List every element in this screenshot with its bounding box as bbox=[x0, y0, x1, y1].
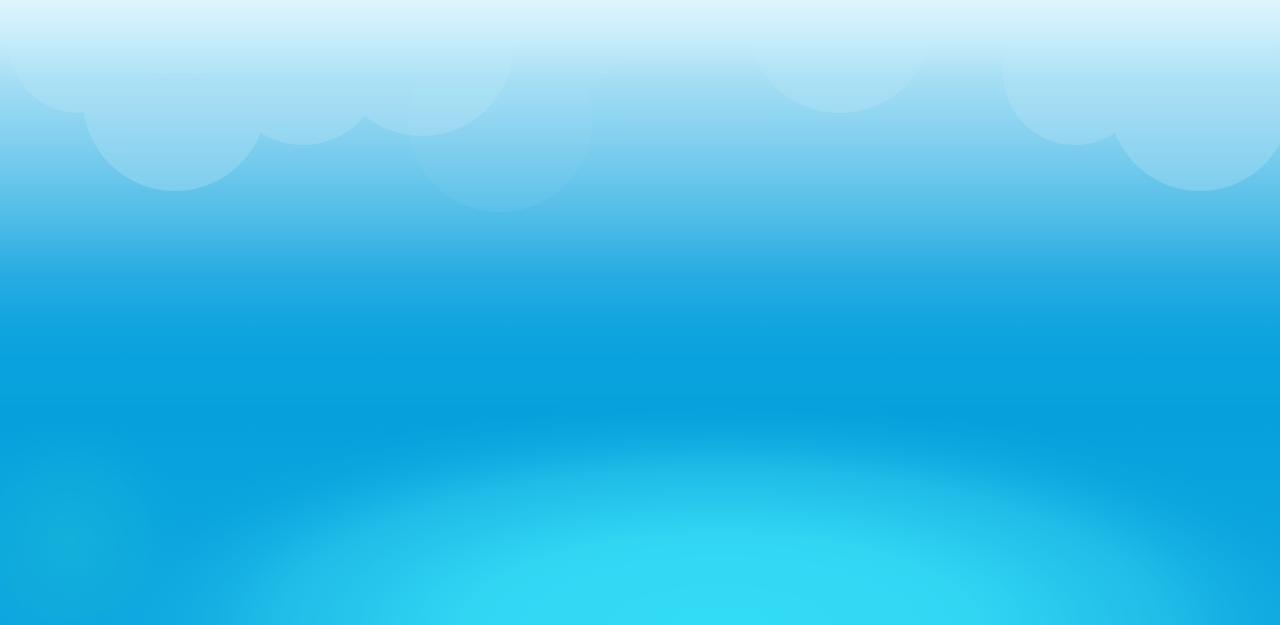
bottom left teal glow bbox=[0, 400, 220, 625]
bottom centre light glow bbox=[0, 380, 1280, 625]
faint back clouds bbox=[116, 0, 632, 212]
front clouds bbox=[25, 87, 1280, 191]
